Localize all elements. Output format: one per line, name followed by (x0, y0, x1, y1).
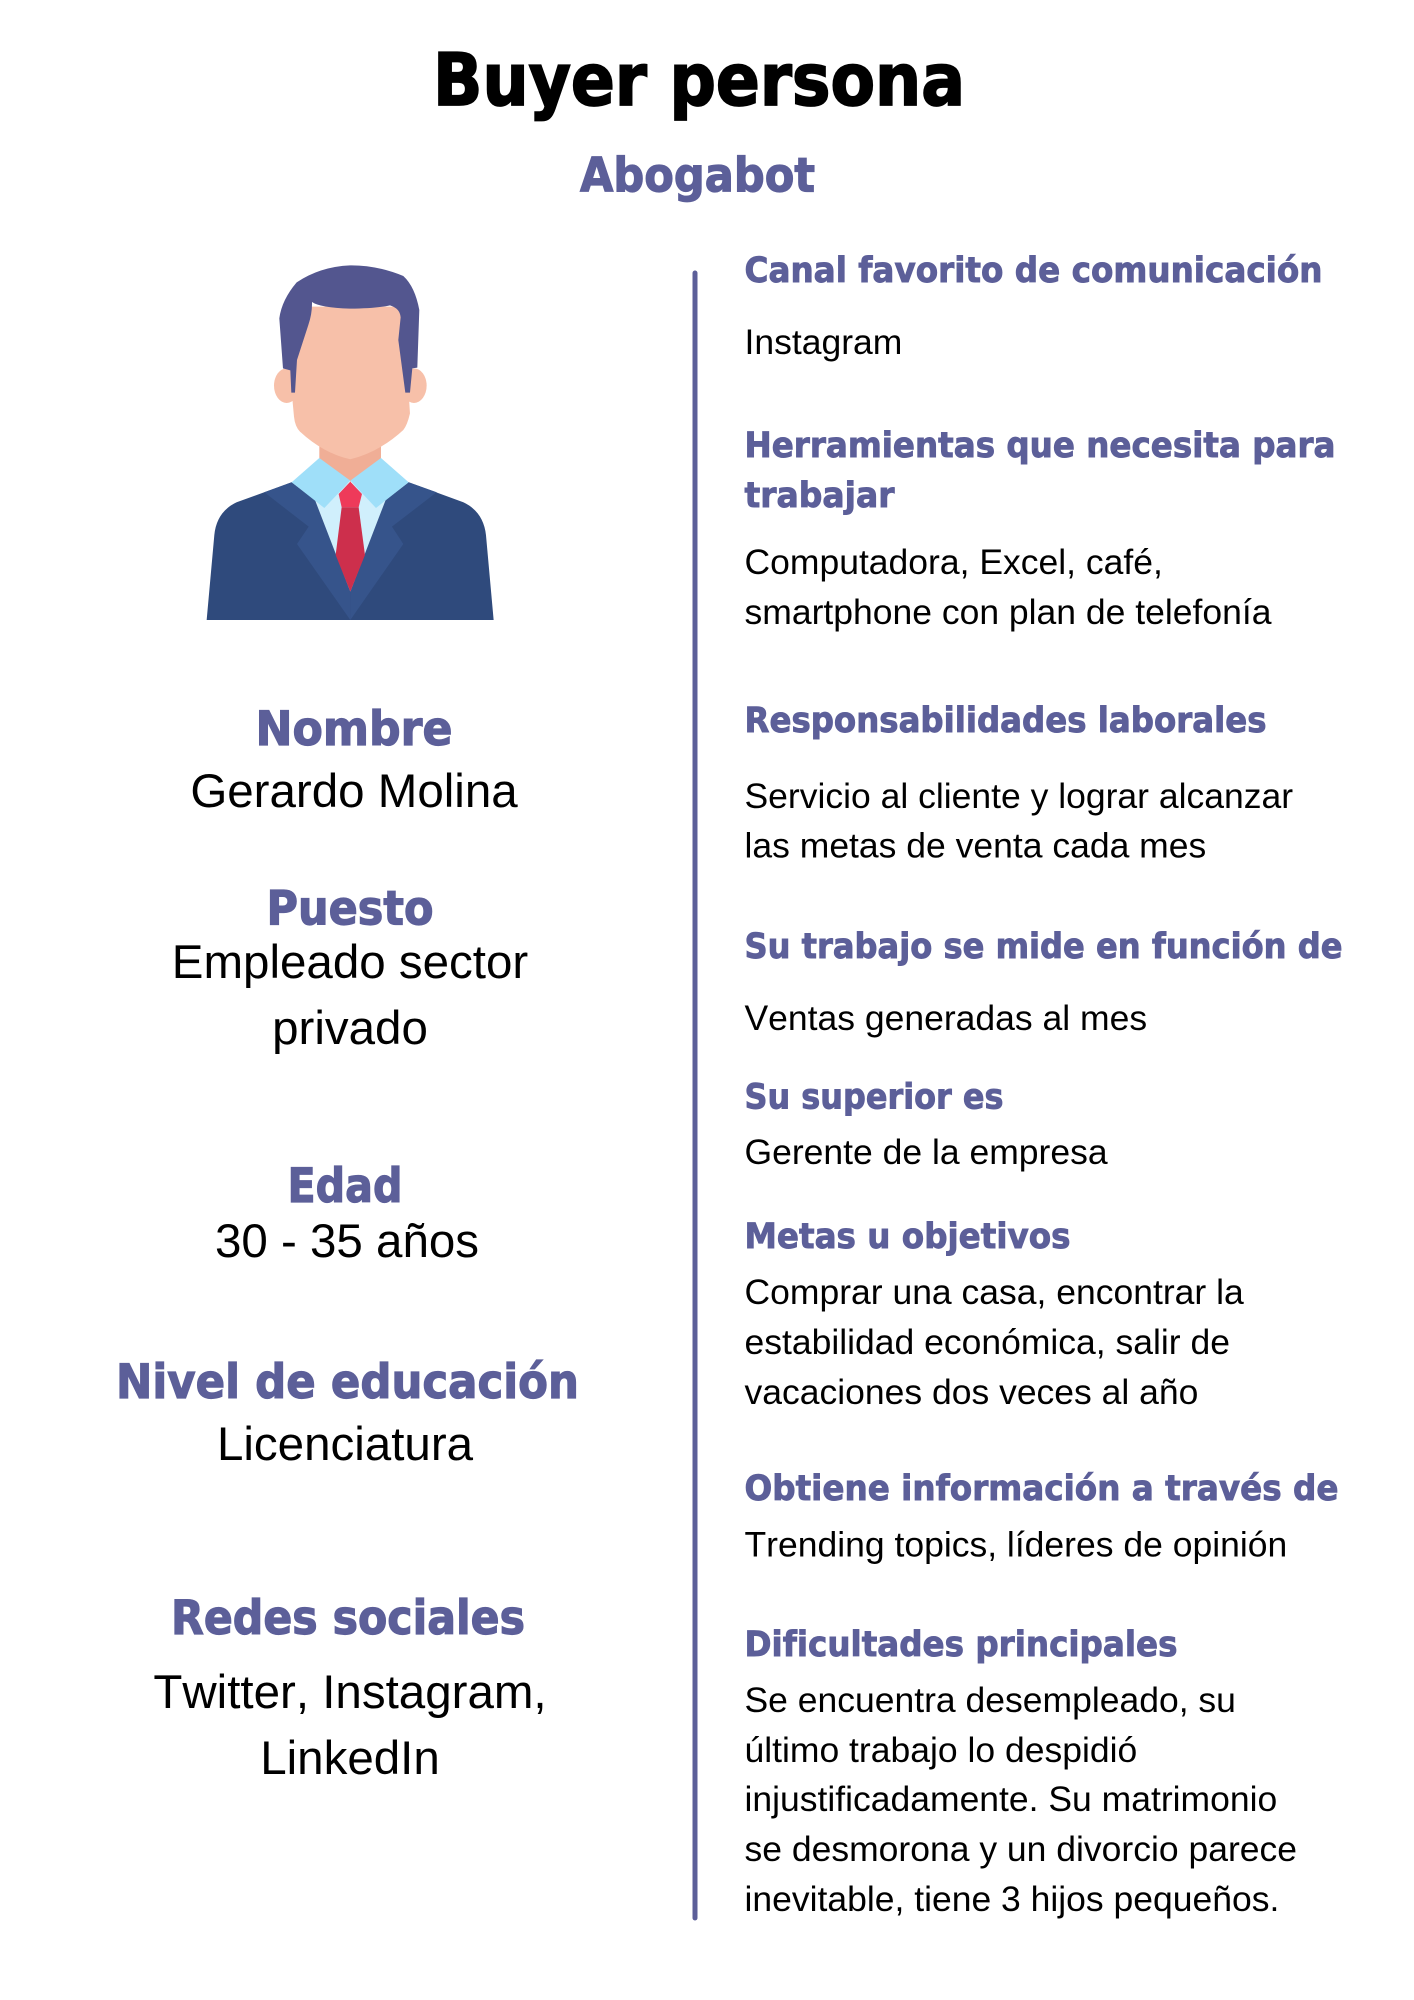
section: herramientas: smartphone con plan de telefonía (744, 592, 1272, 632)
field: nivel de educación (116, 1355, 579, 1471)
section: superior (744, 1078, 1108, 1172)
section: superior: Su superior es (744, 1078, 1004, 1118)
section: metas: vacaciones dos veces al año (744, 1372, 1198, 1412)
panel: right details column (744, 251, 1342, 1919)
field: nivel de educación: Licenciatura (217, 1418, 474, 1471)
section: canal favorito: Instagram (744, 322, 902, 362)
field: puesto: Empleado sector (172, 936, 528, 989)
section: herramientas: trabajar (744, 476, 895, 516)
subtitle: Abogabot (580, 148, 815, 204)
section: herramientas: Herramientas que necesita para (744, 426, 1336, 466)
field: edad: 30 - 35 años (215, 1215, 479, 1268)
section: dificultades (744, 1625, 1297, 1919)
section: medición: Su trabajo se mide en función de (744, 927, 1342, 967)
section: responsabilidades: Servicio al cliente y lograr alcanzar (744, 776, 1293, 816)
section: dificultades: se desmorona y un divorcio parece (744, 1829, 1297, 1869)
section: dificultades: Dificultades principales (744, 1625, 1178, 1665)
field: redes sociales: LinkedIn (260, 1732, 440, 1785)
field: nombre: Nombre (256, 702, 452, 757)
field: puesto: Puesto (266, 882, 434, 936)
section: superior: Gerente de la empresa (744, 1132, 1108, 1172)
section: responsabilidades: Responsabilidades laborales (744, 701, 1266, 741)
section: dificultades: Se encuentra desempleado, su (744, 1680, 1236, 1720)
section: metas (744, 1217, 1244, 1412)
icon: businessman avatar (207, 265, 494, 620)
section: metas: Metas u objetivos (744, 1217, 1070, 1257)
field: nivel de educación: Nivel de educación (116, 1355, 579, 1410)
panel: left profile column (116, 702, 579, 1785)
field: redes sociales (153, 1591, 547, 1785)
field: edad (215, 1159, 479, 1268)
field: nombre (190, 702, 518, 818)
section: información: Obtiene información a través de (744, 1469, 1338, 1509)
section: metas: estabilidad económica, salir de (744, 1322, 1230, 1362)
field: puesto (172, 882, 528, 1055)
section: dificultades: inevitable, tiene 3 hijos pequeños. (744, 1879, 1279, 1919)
field: nombre: Gerardo Molina (190, 765, 518, 818)
section: dificultades: último trabajo lo despidió (744, 1730, 1137, 1770)
section: información (744, 1469, 1338, 1564)
section: herramientas: Computadora, Excel, café, (744, 542, 1163, 582)
field: puesto: privado (272, 1002, 428, 1055)
title: Buyer persona (433, 38, 965, 122)
section: responsabilidades (744, 701, 1293, 866)
section: metas: Comprar una casa, encontrar la (744, 1272, 1244, 1312)
section: medición (744, 927, 1342, 1038)
section: canal favorito (744, 251, 1322, 362)
divider line (692, 270, 698, 1920)
section: herramientas (744, 426, 1336, 632)
field: edad: Edad (288, 1159, 402, 1214)
field: redes sociales: Redes sociales (171, 1591, 525, 1646)
section: canal favorito: Canal favorito de comunicación (744, 251, 1322, 291)
section: responsabilidades: las metas de venta cada mes (744, 826, 1206, 866)
section: dificultades: injustificadamente. Su matrimonio (744, 1779, 1277, 1819)
field: redes sociales: Twitter, Instagram, (153, 1666, 547, 1719)
section: información: Trending topics, líderes de opinión (744, 1524, 1287, 1564)
section: medición: Ventas generadas al mes (744, 998, 1147, 1038)
